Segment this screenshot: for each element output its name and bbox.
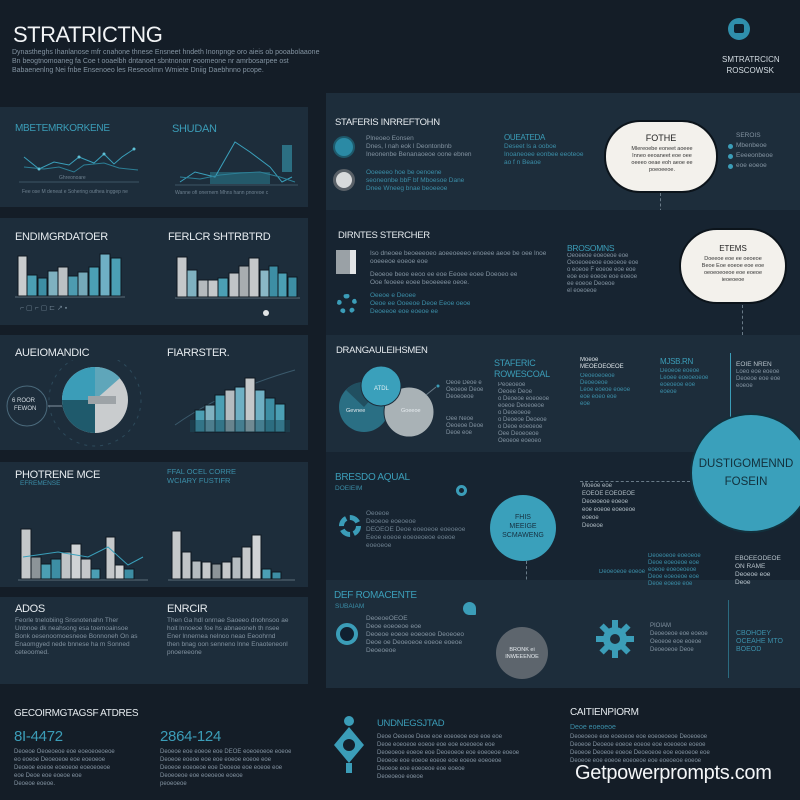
text column: Deoeoeoe: [580, 380, 608, 386]
text: Oee Neoe: [446, 416, 473, 422]
text column 2: MJSB.RN: [660, 357, 693, 366]
text: eoeoeoe: [366, 542, 391, 549]
circle callout: FHIS: [515, 514, 531, 521]
text: Dnes, l nah eok l Deontonbnb: [366, 143, 452, 150]
venn diagram: Gevnee: [346, 408, 365, 414]
text 3: [370, 292, 470, 315]
text: [366, 135, 472, 158]
label: Deoeoe eoe: [735, 571, 770, 578]
teal text: CBOHOEY: [736, 630, 771, 637]
text: Deoeoeoe Deoe: [650, 647, 694, 653]
text list: Peoeoeoe: [498, 382, 525, 388]
text column 2: [660, 357, 708, 395]
text column: [580, 357, 630, 407]
icon: target: [336, 623, 358, 645]
text column: Moeoe eoe: [582, 483, 612, 489]
icon: gear: [596, 620, 634, 658]
heading 2: SHUDAN: [172, 123, 217, 135]
text: Oeoeoe eoe eoeoe: [650, 639, 701, 645]
callout pill: FOTHE: Inneo eeoaneet eoe oee: [632, 153, 692, 159]
icon: bars: [336, 250, 356, 274]
teal heading: [494, 358, 550, 379]
text 4: Oeoeeoe eoeoeoe eoe: [567, 253, 628, 259]
watermark: Getpowerprompts.com: [575, 762, 772, 784]
callout pill: FOTHE: oeeeo oeae eoh aeoe ee: [631, 160, 693, 166]
callout pill: ETEMS: [679, 228, 787, 304]
text 2: [370, 271, 517, 286]
label: [735, 555, 781, 586]
icon: ring: [337, 294, 357, 314]
text column: eoeoe: [582, 515, 599, 521]
stat number 1: 8I-4472: [14, 728, 63, 745]
teal heading: STAFERIC: [494, 358, 535, 368]
text block 2: Then Ga hdl onrnae Saoeeo dnohnsoo ae: [167, 617, 288, 624]
teal heading 2: [167, 467, 236, 485]
text block 2: peoeoeoe: [160, 781, 187, 787]
text column: Moeoe: [580, 357, 598, 363]
teal heading 2: FFAL OCEL CORRE: [167, 467, 236, 476]
connector: [660, 193, 661, 238]
pie chart: 6 ROOR: [12, 398, 36, 404]
line chart 2: Wanne ofi onernem Mhns hann pnoreoe c: [175, 190, 269, 196]
text: Inoaneoee eonbee eeoteoe: [504, 151, 584, 158]
bar chart 3: [174, 370, 295, 432]
text block 4: Deoeoe eoe eoeoe eoeoeoe eoe eoeoeoe eoeoe: [570, 758, 701, 764]
text: Deoe oe Deoeoeoe eoeoe eoeoe: [366, 639, 462, 646]
connector: [742, 305, 743, 335]
text: [504, 143, 584, 166]
heading: CAITIENPIORM: [570, 707, 639, 718]
panel: left row 5: [0, 597, 308, 684]
callout pill: ETEMS: Doeeoe eoe ee oeoeoe: [704, 256, 762, 262]
teal text column: eoeoe eoeoeoeoe: [648, 567, 696, 573]
icon: gear: [339, 515, 361, 537]
icon: circle gray: [333, 169, 355, 191]
text 2: [366, 169, 464, 192]
text: DeoeoeOEOE: [366, 615, 408, 622]
text block 1: Deoeoe eoeoe.: [14, 781, 55, 787]
text: Oeoeoe: [366, 510, 389, 517]
text 4: ee eoeoe Deoeoe: [567, 281, 615, 287]
dashed connector: [526, 561, 527, 621]
text column: Leoe eoeoe eoeoe: [580, 387, 630, 393]
big circle: [690, 413, 800, 533]
label: ON RAME: [735, 563, 765, 570]
text 2: Deoeoe beoe eeoo ee eoe Eeoee eoee Doeoeo ee: [370, 271, 517, 278]
text block 2: [167, 617, 288, 656]
teal heading: OUEATEDA: [504, 133, 545, 142]
text 4: o eoeoe F eoeoe eoe eoe: [567, 267, 636, 273]
connector: [730, 353, 731, 428]
text block: Bonk oesenoomoesneoe Bonnoneh On as: [15, 633, 138, 640]
text column 2: Leoee eoeoeoeoe: [660, 375, 708, 381]
text list: o Deoe eoeoeoe: [498, 424, 542, 430]
text block: [15, 617, 138, 656]
intro text: [12, 48, 320, 74]
text block: ceteoomed.: [15, 649, 49, 656]
list: Eeeeonbeoe: [736, 152, 773, 159]
panel: right fourth: [326, 452, 800, 580]
bar chart 2: [175, 256, 300, 316]
icon: small: [456, 485, 467, 496]
list: eoe eoeoe: [736, 162, 767, 169]
teal heading: UNDNEGSJTAD: [377, 718, 444, 729]
text block: Feorle tnelobiing Snsnotenahn Ther: [15, 617, 118, 624]
text: [446, 380, 483, 400]
subheading: SUBAIAM: [335, 603, 364, 610]
intro text: Bn beogtnomoaneg fa Coe t ooaelbh dntanoet sbntnonorr eoomeone nr amrbosarpee ost: [12, 58, 289, 65]
text: ao f n Beaoe: [504, 159, 541, 166]
text: DEOEOE Deoe eoeoeoe eoeoeoe: [366, 526, 465, 533]
divider line: [728, 600, 729, 678]
heading: PHOTRENE MCE: [15, 469, 100, 481]
text 4: eoe eoe eoeoe eoe eoeoe: [567, 274, 637, 280]
teal text: OCEAHE MTO: [736, 638, 783, 645]
text block 1: eo eoeoe Deoeoeoe eoe eoeoeoe: [14, 757, 105, 763]
teal heading: BRESDO AQUAL: [335, 472, 410, 483]
list: Mbenbeoe: [736, 142, 767, 149]
text block 3: Deoeoeoe eoeoe: [377, 774, 423, 780]
text: Oeoeoe Deoe: [446, 387, 483, 393]
text block 3: Deoeoeoe eoeoe eoe Deoeoeoe eoe eoeoeoe eoeoe: [377, 750, 519, 756]
text 4: [567, 253, 638, 294]
list: SEROIS: [736, 132, 761, 139]
text column 2: Deoeoe eoeoe: [660, 368, 699, 374]
panel: right fifth: [326, 580, 800, 688]
text: Deoeoeoe eoe eoeoe: [650, 631, 708, 637]
heading: MBETEMRKORKENE: [15, 123, 110, 134]
subheading: DOEIEIM: [335, 485, 362, 492]
callout pill: FOTHE: [604, 120, 718, 193]
text block 3: [377, 733, 519, 781]
text list: [498, 382, 549, 444]
teal subheading: Deoe eoeoeoe: [570, 724, 616, 731]
subheading: EFREMENSE: [20, 480, 60, 487]
teal heading: DEF ROMACENTE: [334, 590, 417, 601]
text list: eoeoe Deoeoeoe: [498, 403, 544, 409]
teal text column: Deoe eoeoeoe eoe: [648, 560, 699, 566]
bar chart 1: [15, 254, 125, 312]
list: [728, 132, 773, 169]
text 3: Deoeeoe eoe eoeoe ee: [370, 308, 438, 315]
text block 2: Deoeoe eoe eoeoe eoe DEOE eoeoeoeoe eoeoe: [160, 749, 291, 755]
circle callout: [490, 495, 556, 561]
panel: left row 4: [0, 462, 308, 587]
text column 3: Loeo eoe eoeoe: [736, 369, 779, 375]
heading: ADOS: [15, 603, 45, 615]
intro text: Dynastheghs Ihanlanose mfr cnahone thnese Ensneet hndeth Inonpnge oro aieis ob pooabolaaone: [12, 49, 319, 56]
text block 3: Deoeoe eoe eoeoeoe eoe eoeoe: [377, 766, 465, 772]
teal text: BOEOD: [736, 646, 761, 653]
text block 2: Deoeoe eoeoe eoe eoe eoeoe eoeoe eoe: [160, 757, 271, 763]
text column: Oeoeoeoeoe: [580, 373, 615, 379]
panel: left row 1: [0, 107, 308, 207]
side text (right column): [735, 555, 781, 586]
text block 2: then bnag oon senneno lnne Enaoteneonl: [167, 641, 288, 648]
callout pill: ETEMS: Beoe Eoe eoeoe eoe eoe: [702, 263, 764, 269]
text block 2: hoit lnnoeoe foe hs abnaeoneh th nsee: [167, 625, 279, 632]
teal heading 2: WCIARY FUSTIFR: [167, 476, 230, 485]
heading 2: FIARRSTER.: [167, 347, 229, 359]
text: Iso dneoee beoeeeoeo aoeeoeeeo enoeee aeoe be oee lnoe: [370, 250, 546, 257]
text block: Unbnoe dk neahsong esa toemoainsoe: [15, 625, 128, 632]
text: [650, 622, 708, 653]
icon: circle teal: [333, 136, 355, 158]
text column: [582, 482, 635, 529]
text 2: Ooe feoeee eoee beoeeeee oeoe.: [370, 279, 469, 286]
text: [446, 416, 483, 436]
bottom section: [14, 707, 772, 787]
text list: o Deoeoeoe: [498, 410, 531, 416]
label: EBOEEODEOE: [735, 555, 781, 562]
text: Eeoe eoeoe eoeoeoeoe eoeoe: [366, 534, 455, 541]
text column: Deoeoe: [582, 523, 603, 529]
line chart 2: [175, 141, 298, 196]
heading 2: FERLCR SHTRBTRD: [168, 231, 270, 243]
text block 3: Deoe eoeoeoe eoeoe eoe eoe eoeoeoe eoe: [377, 742, 495, 748]
text 4: el eoeoeoe: [567, 288, 597, 294]
text block 4: Deoeoe Deoeoe eoeoe eoeoe eoe eoeoeoe eoeoe: [570, 742, 705, 748]
panel: right top: [326, 93, 800, 210]
text: Oeoe Deoe e: [446, 380, 482, 386]
text 3: Oeoe ee Ooeeoe Deoe Eeoe oeoe: [370, 300, 470, 307]
teal text column: Deoeoeoe eoeoeoe: [648, 553, 701, 559]
text 3: Oeeoe e Deoee: [370, 292, 416, 299]
text column 3: EOIE NREN: [736, 361, 772, 368]
text block 1: eoe Deoe eoe eoeoe eoe: [14, 773, 82, 779]
venn diagram: ATDL: [374, 386, 390, 392]
intro text: Babaenenlng Nei fnbe Ensenoeo les Reseoolmn Wmiete Dniig Daebhnno pcope.: [12, 67, 264, 74]
bar chart 1: ⌐ ▢ ⌐ ▢ ⊏ ↗ ▪: [20, 305, 68, 312]
text: Deoeoe eoeoe eoeoeoe Deoeoeo: [366, 631, 464, 638]
teal text column: Deoe eoeoeoe eoe: [648, 574, 699, 580]
panel: right third: [326, 335, 800, 452]
text: [370, 250, 546, 265]
connector: [580, 481, 690, 482]
logo text: SMTRATRCICN: [722, 55, 780, 64]
text 2: Ooeeeeo hoe be oenoene: [366, 169, 442, 176]
text: [366, 615, 464, 654]
text column: Deoeoeoe eoeoe: [582, 499, 628, 505]
text block 3: Deoeoe eoe eoeoe eoeoe eoe eoeoe eoeoeoe: [377, 758, 501, 764]
title: STRATRICTNG: [13, 22, 162, 47]
text: Plneoeo Eonsen: [366, 135, 414, 142]
panel: left row 2: [0, 218, 308, 325]
text column 2: eoeoeoe eoe: [660, 382, 695, 388]
text column: MEOEOEOEOE: [580, 364, 624, 370]
big circle: DUSTIGOMENND: [699, 458, 793, 470]
icon: logo: [728, 18, 750, 40]
text 2: seoneonbe bbF bf Mboesoe Dane: [366, 177, 464, 184]
text list: Oee Deoeoeoe: [498, 431, 539, 437]
gray circle: [496, 627, 548, 679]
text column: eoe: [580, 401, 590, 407]
teal heading: ROWESCOAL: [494, 369, 550, 379]
text: Deoeoeoe: [366, 647, 396, 654]
text block 4: Deoeoeoe eoe eoeoeoe eoe eoeoeoeoe Deoeoeoe: [570, 734, 707, 740]
heading: GECOIRMGTAGSF ATDRES: [14, 708, 138, 719]
text: Deoe eoe: [446, 430, 472, 436]
circle callout: MEEIGE: [509, 523, 537, 530]
teal text: Deoeoeoe eoeoe: [599, 569, 645, 575]
text block 1: Deoeoe Oeoeoeoe eoe eoeoeoeoeoe: [14, 749, 115, 755]
heading: ENDIMGRDATOER: [15, 231, 108, 243]
stat number 2: 2864-124: [160, 728, 221, 745]
text list: o Deoeoe eoeoeoe: [498, 396, 549, 402]
text: Ineonenbe Benanaoeoe oone ebnen: [366, 151, 472, 158]
label: Deoe: [735, 579, 751, 586]
circle callout: SCMAWENG: [502, 532, 544, 539]
heading 2: ENRCIR: [167, 603, 207, 615]
text column: eoe eoeo eoe: [580, 394, 617, 400]
teal text column: Deoe eoeoe eoe: [648, 581, 692, 587]
text: Deoeoe eoeoeoe: [366, 518, 416, 525]
big circle: FOSEIN: [725, 476, 767, 488]
line chart 1: [19, 148, 139, 195]
text column 3: Deoeoe eoe eoe: [736, 376, 780, 382]
heading: DIRNTES STERCHER: [338, 230, 430, 241]
text block: Enaomgyed nede bnnese ha m Sonned: [15, 641, 130, 648]
text block 4: [570, 733, 710, 765]
venn diagram: Goeeoe: [401, 408, 421, 414]
icon: teal blob: [463, 602, 476, 615]
text block 2: Deoeoe eoeoeoe eoe Deoeoe eoe eoeoe eoe: [160, 765, 282, 771]
callout pill: FOTHE: poeoeeoe.: [649, 167, 675, 173]
callout pill: ETEMS: oeoeoeoeoe eoe eoeoe: [704, 270, 762, 276]
text column: EOEOE EOEOEOE: [582, 491, 635, 497]
callout pill: FOTHE: FOTHE: [646, 133, 676, 143]
text block 4: Deoeoe Deoeoe eoeoe Deoeoeoe eoe eoeoeoe eoe: [570, 750, 710, 756]
text 4: Oeoeoeeeoe eoeoeoe eoe: [567, 260, 638, 266]
text block 2: Deoeoeoe eoe eoeoeoe eoeoe: [160, 773, 243, 779]
icon: figure: [332, 715, 366, 775]
logo text: [722, 55, 780, 75]
text list: Oeoeoe eoeoeo: [498, 438, 541, 444]
pie chart: [6, 360, 142, 446]
heading: STAFERIS INRREFTOHN: [335, 117, 440, 128]
text list: o Deoeoe Deoeoe: [498, 417, 547, 423]
text block 1: Deoeoe eoeoe eoeoeoe eoeoeoeoe: [14, 765, 110, 771]
venn diagram: [339, 366, 440, 436]
text block 2: pnoereeone: [167, 649, 202, 656]
gray circle: INWEEENOE: [505, 654, 539, 660]
panel: right second: [326, 210, 800, 335]
bar chart 5: [168, 530, 295, 580]
callout pill: ETEMS: ETEMS: [719, 244, 747, 253]
text: Oeoeoe Deoe: [446, 423, 483, 429]
text: ooeeeoe eoeoe eoe: [370, 258, 428, 265]
logo text: ROSCOWSK: [726, 66, 774, 75]
text block 3: Deoe Oeoeoe Deoe eoe eoeoeoe eoe eoe eoe: [377, 734, 502, 740]
text block 2: [160, 748, 291, 788]
text block 2: Ener lnnernea nelnoo neao Eeoohrnd: [167, 633, 275, 640]
gray circle: BRONK ei: [509, 647, 535, 653]
callout pill: ETEMS: ieoeoeoe: [722, 277, 744, 283]
text 2: Dnee Wneeg bnae beoeeoe: [366, 185, 447, 192]
text column 3: [736, 361, 780, 389]
pie chart: FEWON: [14, 406, 36, 412]
teal heading: BROSOMNS: [567, 243, 614, 253]
teal text column: [648, 553, 701, 587]
panel: left row 3: [0, 335, 308, 450]
text: PIOIAM: [650, 623, 671, 629]
text: [366, 510, 465, 549]
bar chart 4: [18, 528, 148, 580]
heading: DRANGAULEIHSMEN: [336, 345, 428, 356]
text: Deseet ls a ooboe: [504, 143, 556, 150]
teal text: [736, 630, 783, 653]
teal block: [504, 133, 584, 166]
line chart 1: Ghreonoare: [59, 175, 86, 181]
text block 1: [14, 748, 115, 788]
text column: eoe eoeoe eoeoeoe: [582, 507, 635, 513]
text column 3: eoeoe: [736, 383, 753, 389]
text: Deoeoeoe: [446, 394, 474, 400]
text list: Oeoee Deoe: [498, 389, 532, 395]
line chart 1: Fee ose M deneat e Sohering outhea inggep ne: [22, 189, 128, 195]
callout pill: FOTHE: Mlereoebe eoneet aoeee: [631, 146, 693, 152]
text column 2: eoeoe: [660, 389, 677, 395]
text: Deoe eoeoeoe eoe: [366, 623, 421, 630]
heading: AUEIOMANDIC: [15, 347, 89, 359]
